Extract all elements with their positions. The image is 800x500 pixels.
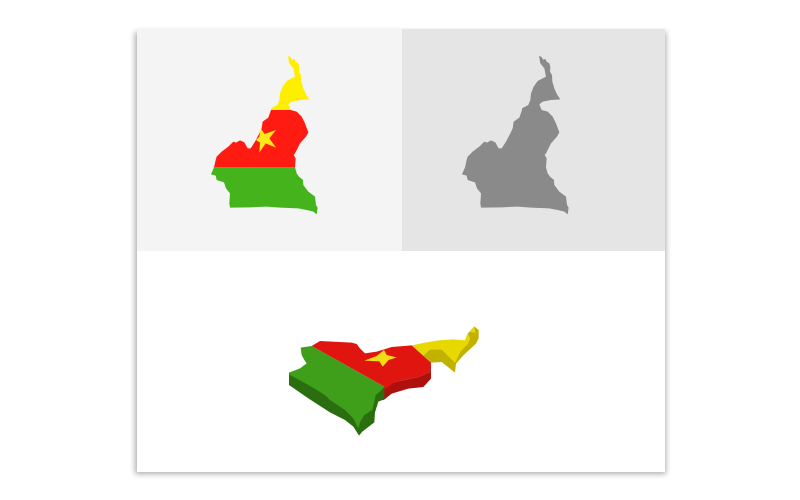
- icon: yellow star: [364, 350, 397, 367]
- map: 3D extruded Cameroon: [289, 326, 479, 436]
- map: gray Cameroon silhouette: [462, 56, 568, 214]
- green extruded section: [289, 346, 384, 436]
- infographic: Cameroon map variants: [132, 28, 670, 478]
- icon: yellow star: [256, 128, 276, 153]
- panel: flag map background: [137, 29, 402, 251]
- map: flat flag-coloured Cameroon: [211, 56, 318, 214]
- red extruded section: [312, 341, 431, 400]
- panel: white sheet: [137, 29, 665, 472]
- panel: gray map background: [402, 29, 665, 251]
- yellow extruded section: [412, 326, 479, 373]
- panel shadow: [135, 32, 666, 474]
